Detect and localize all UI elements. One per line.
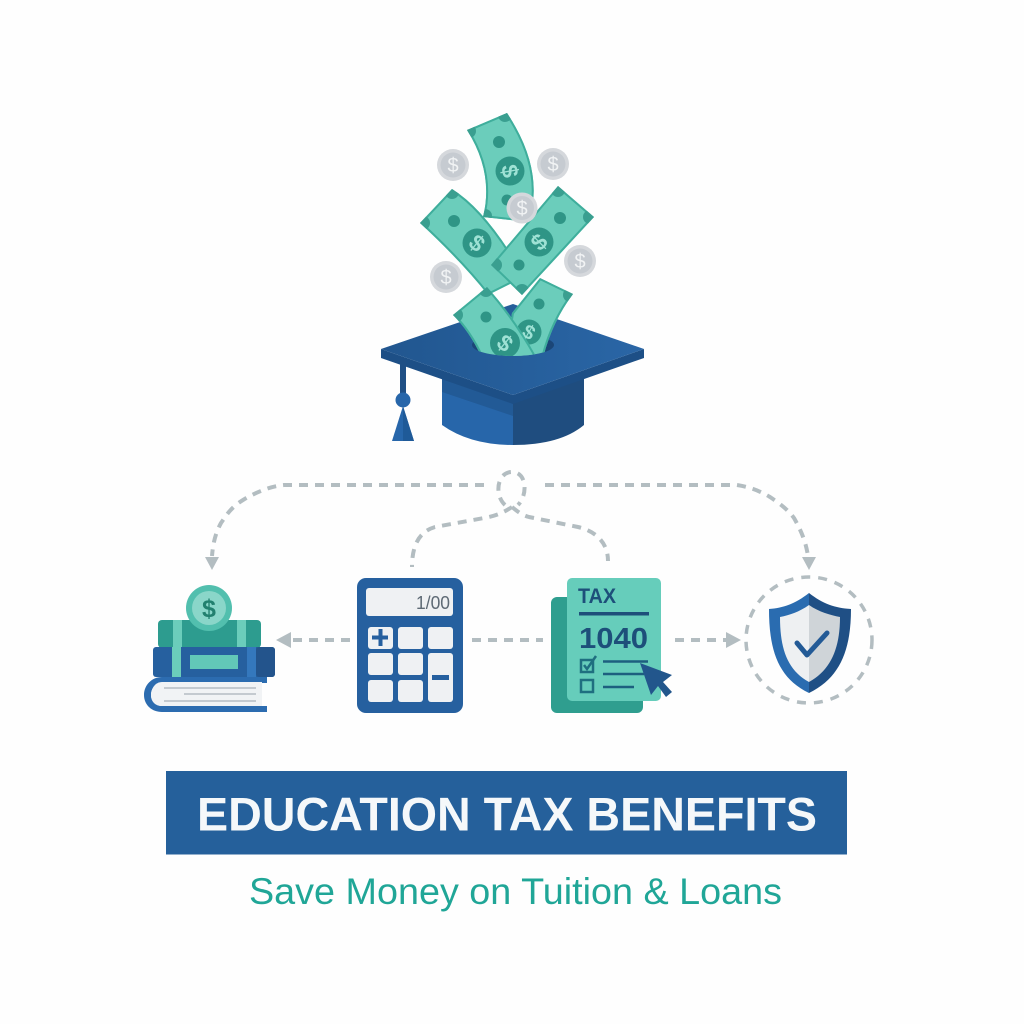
cap base: [442, 378, 584, 445]
bill: bottom front: $: [492, 329, 518, 357]
tassel: [392, 360, 414, 441]
checklist: [581, 656, 648, 692]
connector: to shield: [545, 485, 808, 556]
coin: top left: [437, 149, 469, 181]
icon: tax form 1040: [551, 578, 672, 713]
bill: top: $: [496, 162, 524, 180]
connector: to books: [212, 485, 484, 556]
dashed flow connectors: [212, 472, 808, 640]
bill: left: $: [464, 229, 490, 257]
bill: bottom back: [506, 278, 573, 356]
icon: shield in dashed ring: [746, 577, 872, 703]
minus sign: [432, 675, 449, 680]
calculator screen: 1/00: [416, 593, 450, 613]
cap board: [381, 304, 644, 404]
coin: right: $: [574, 251, 586, 273]
connector: calculator to books: [288, 638, 350, 642]
shield: [769, 593, 851, 693]
title banner: [166, 771, 847, 854]
connector: tax form to shield: [675, 638, 730, 642]
form label TAX: TAX: [578, 585, 616, 608]
icon: books with dollar coin: [144, 585, 275, 712]
dollar coin: $: [202, 595, 216, 623]
bill: top: [467, 113, 534, 220]
arrowhead: books side: [276, 632, 291, 648]
bill: bottom front: [453, 287, 535, 356]
coin: left: $: [440, 267, 452, 289]
arrowhead: shield side: [726, 632, 741, 648]
coin: top right: [537, 148, 569, 180]
coin: top right: $: [547, 154, 559, 176]
bill: left: [420, 189, 510, 293]
bill: bottom back: $: [518, 321, 539, 345]
bottom book: [144, 677, 267, 712]
calculator keys: [368, 627, 453, 702]
bill: right: $: [525, 228, 553, 256]
arrowhead: books top: [205, 557, 219, 570]
coin: left: [430, 261, 462, 293]
form number: 1040: [579, 623, 648, 655]
coin: top left: $: [447, 155, 459, 177]
subtitle: Save Money on Tuition & Loans: [249, 871, 782, 912]
title: EDUCATION TAX BENEFITS: [197, 788, 817, 840]
connector: calculator to tax form: [472, 638, 543, 642]
cursor arrow: [640, 663, 672, 697]
arrowhead: shield top: [802, 557, 816, 570]
coin: centre: $: [516, 198, 528, 220]
bill: right: [491, 186, 594, 295]
connector: to calculator: [412, 507, 512, 567]
icon: calculator: [357, 578, 463, 713]
coin: centre: [506, 192, 538, 224]
coin: right: [564, 245, 596, 277]
middle book: [153, 647, 275, 677]
connector: loop: [498, 472, 525, 505]
check mark: [797, 633, 827, 655]
plus sign: [372, 629, 388, 646]
graduation cap with falling money: [381, 108, 644, 445]
connector: to tax form: [512, 507, 608, 561]
top book: [158, 620, 261, 648]
